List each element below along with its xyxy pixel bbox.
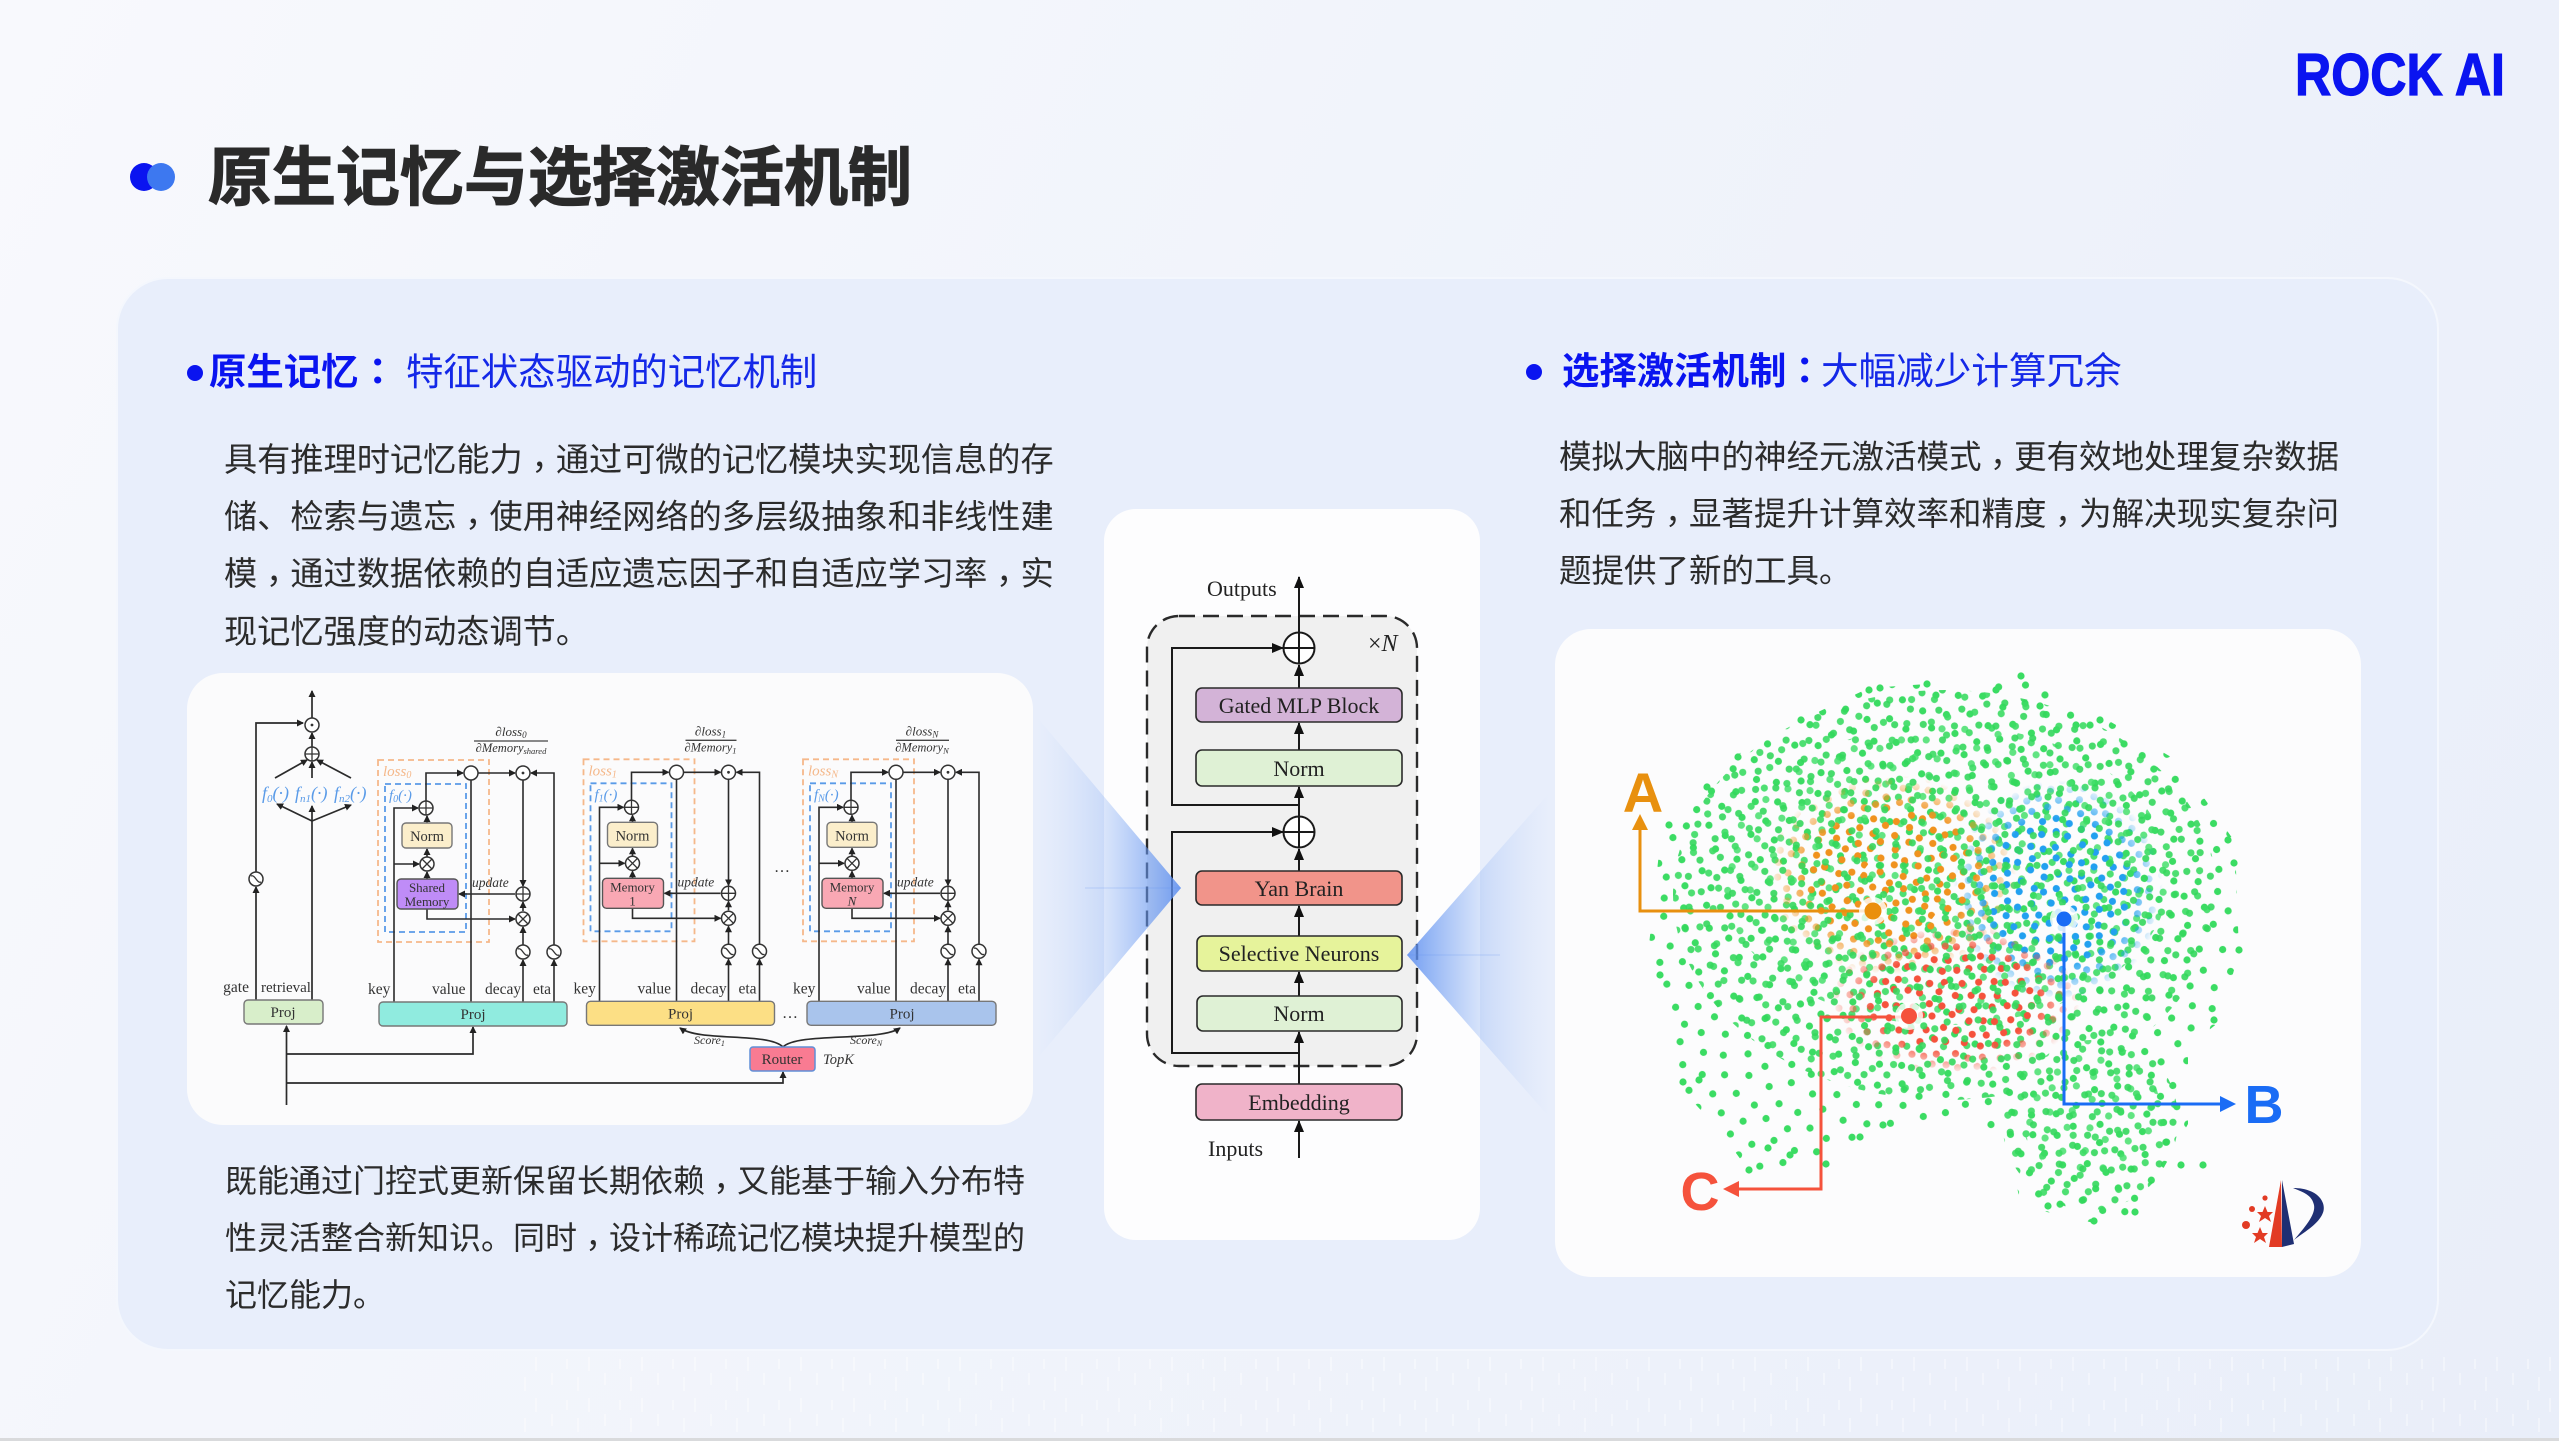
title: 原生记忆与选择激活机制 — [208, 142, 912, 214]
memory block 1 — [574, 723, 774, 1025]
input lines and router: … — [782, 1005, 798, 1022]
memory block 1: decay — [690, 980, 727, 997]
gate and retrieval branch: n1 — [300, 793, 311, 805]
memory block 0: decay — [485, 981, 521, 998]
memory block 1: 1 — [599, 793, 604, 804]
memory block 0: ∂loss — [495, 724, 522, 739]
block labels: Gated MLP Block — [1219, 693, 1379, 718]
input lines and router: Score — [850, 1033, 877, 1047]
heading: native memory: 原生记忆 — [209, 351, 359, 393]
memory block 0: update — [472, 875, 509, 890]
memory block 0 — [368, 724, 567, 1026]
memory block 0: eta — [533, 981, 551, 998]
gate and retrieval branch: Proj — [270, 1005, 296, 1021]
memory block 0: 0 — [522, 730, 527, 740]
memory block N: N — [830, 769, 839, 780]
memory block 0: shared — [524, 746, 547, 756]
text block: native memory summary — [225, 1162, 1025, 1313]
callout A: A — [1623, 761, 1663, 824]
connector arrows — [1172, 577, 1299, 1158]
gate and retrieval branch: (·) — [311, 783, 328, 804]
memory block 1: Norm — [616, 828, 650, 844]
input lines and router: Router — [762, 1052, 802, 1068]
heading: native memory: ： — [359, 351, 396, 393]
block labels — [1219, 693, 1379, 1115]
heading: native memory: 特征状态驱动的记忆机制 — [406, 351, 817, 393]
memory block 1: value — [638, 980, 671, 997]
memory block 1: 1 — [612, 769, 617, 780]
card background — [187, 673, 1033, 1125]
memory block N: decay — [910, 980, 946, 997]
memory block 0: Memory — [405, 894, 450, 909]
arrow: focus wedge from memory diagram to Yan Brain — [1062, 748, 1181, 1028]
memory block 0: Shared — [409, 880, 446, 895]
card background — [1104, 509, 1480, 1240]
memory block N: (·) — [825, 787, 839, 803]
text block: native memory summary: 记忆能力。 — [225, 1277, 385, 1313]
gate and retrieval branch: (·) — [273, 783, 289, 804]
heading: native memory — [187, 351, 817, 393]
heading: selective activation — [1526, 350, 2122, 392]
memory block 1: Memory — [610, 879, 655, 894]
input lines and router — [286, 859, 900, 1105]
block labels: Norm — [1273, 756, 1325, 781]
block labels: Norm — [1273, 1001, 1325, 1026]
io labels: Outputs — [1207, 576, 1277, 601]
memory block N: N — [931, 729, 939, 739]
gate and retrieval branch: retrieval — [261, 980, 311, 996]
memory block 0: value — [432, 981, 466, 998]
callout B — [2050, 905, 2284, 1135]
block labels: Embedding — [1248, 1090, 1350, 1115]
input lines and router: N — [876, 1039, 883, 1048]
block labels: Selective Neurons — [1219, 941, 1379, 966]
memory block 0: Norm — [410, 829, 445, 845]
gate and retrieval branch: n2 — [339, 793, 351, 805]
residual add nodes — [1284, 632, 1314, 848]
icon: title dots — [130, 163, 175, 191]
gate and retrieval branch: gate — [223, 979, 249, 996]
gate and retrieval branch: f — [295, 783, 300, 803]
input lines and router: Score — [694, 1033, 721, 1047]
callout C: C — [1680, 1162, 1720, 1222]
memory block 0: f — [389, 788, 393, 804]
panel: main content — [116, 277, 2439, 1351]
gate and retrieval branch: f — [262, 783, 267, 803]
memory block N: ∂Memory — [895, 740, 943, 754]
memory block 0: 0 — [393, 794, 398, 805]
callout B: B — [2244, 1075, 2284, 1135]
memory block 1: ∂loss — [695, 723, 722, 738]
diagram content — [223, 691, 996, 1105]
text block: native memory description: 模，通过数据依赖的自适应遗忘因子和自适应学习率，实 — [224, 556, 1054, 601]
text block: native memory description: 现记忆强度的动态调节。 — [224, 614, 589, 651]
memory block 0: key — [368, 981, 391, 998]
memory block N: Proj — [889, 1006, 915, 1022]
callout C — [1680, 1002, 1923, 1222]
memory block N: N — [942, 745, 950, 755]
scatter points — [1640, 670, 2250, 1230]
memory block 0: loss — [383, 764, 406, 780]
text block: selective activation description: 模拟大脑中的神经元激活模式，更有效地处理复杂数据 — [1559, 438, 2339, 482]
memory block N: update — [897, 874, 934, 889]
text block: selective activation description: 题提供了新的工具。 — [1559, 553, 1852, 589]
memory block 1: f — [594, 787, 599, 803]
memory block 0: Proj — [460, 1007, 486, 1023]
memory block N: value — [857, 980, 891, 997]
arrow: focus wedge from scatter to Selective Neurons — [1407, 822, 1524, 1088]
panel: memory architecture diagram — [187, 673, 1033, 1125]
io labels: Inputs — [1208, 1136, 1263, 1161]
memory block 1: 1 — [629, 893, 636, 908]
text block: native memory description — [224, 442, 1054, 651]
input lines and router: TopK — [823, 1052, 855, 1068]
memory block 1: ∂Memory — [684, 740, 732, 754]
text block: native memory summary: 既能通过门控式更新保留长期依赖，又能基于输入分布特 — [225, 1162, 1025, 1206]
memory block 1: key — [574, 980, 596, 997]
icon: institute emblem — [2242, 1180, 2324, 1247]
text block: native memory description: 具有推理时记忆能力，通过可微的记忆模块实现信息的存 — [224, 442, 1054, 486]
memory block 0: (·) — [398, 788, 412, 804]
block stack — [1196, 688, 1402, 1120]
panel: selective neurons block diagram — [1104, 509, 1480, 1240]
text block: selective activation description: 和任务，显著提升计算效率和精度，为解决现实复杂问 — [1559, 496, 2339, 540]
block labels: Yan Brain — [1255, 876, 1343, 901]
memory block N: N — [847, 893, 858, 908]
gate and retrieval branch: f — [334, 783, 339, 803]
input lines and router: 1 — [721, 1039, 725, 1048]
callout A — [1623, 761, 1887, 925]
memory block 1: (·) — [604, 787, 617, 803]
heading: selective activation: ： — [1786, 350, 1823, 392]
gate and retrieval branch: (·) — [350, 783, 367, 804]
memory block 1: update — [678, 874, 714, 889]
gate and retrieval branch — [223, 691, 367, 1024]
io labels — [1207, 576, 1400, 1161]
text block: native memory description: 储、检索与遗忘，使用神经网络的多层级抽象和非线性建 — [224, 499, 1054, 544]
input lines and router: … — [774, 859, 790, 876]
gate and retrieval branch: 0 — [267, 793, 273, 805]
memory block N: key — [793, 980, 816, 997]
text block: selective activation description — [1559, 438, 2339, 589]
heading: selective activation: 选择激活机制 — [1562, 350, 1786, 392]
card background — [1555, 629, 2361, 1277]
text block: native memory summary: 性灵活整合新知识。同时，设计稀疏记忆模块提升模型的 — [225, 1220, 1025, 1264]
heading: selective activation: 大幅减少计算冗余 — [1821, 350, 2122, 392]
memory block N: eta — [958, 980, 976, 997]
memory block 1: 1 — [732, 745, 737, 755]
repeat block with dashed outline — [1147, 616, 1417, 1066]
memory block 1: loss — [588, 763, 612, 779]
memory block N: Memory — [830, 879, 875, 894]
memory block N: N — [817, 793, 826, 804]
memory block N: Norm — [835, 828, 870, 844]
memory block 1: 1 — [722, 729, 726, 739]
memory block N: f — [814, 787, 818, 803]
memory block N: ∂loss — [906, 723, 932, 738]
memory block 1: eta — [738, 980, 757, 997]
memory block N: loss — [808, 763, 831, 779]
memory block 0: 0 — [406, 770, 411, 781]
memory block N — [793, 723, 996, 1025]
panel: neuron activation scatter — [1555, 629, 2361, 1277]
memory block 0: ∂Memory — [476, 741, 524, 755]
memory block 1: Proj — [668, 1006, 693, 1022]
io labels: ×N — [1368, 631, 1400, 657]
